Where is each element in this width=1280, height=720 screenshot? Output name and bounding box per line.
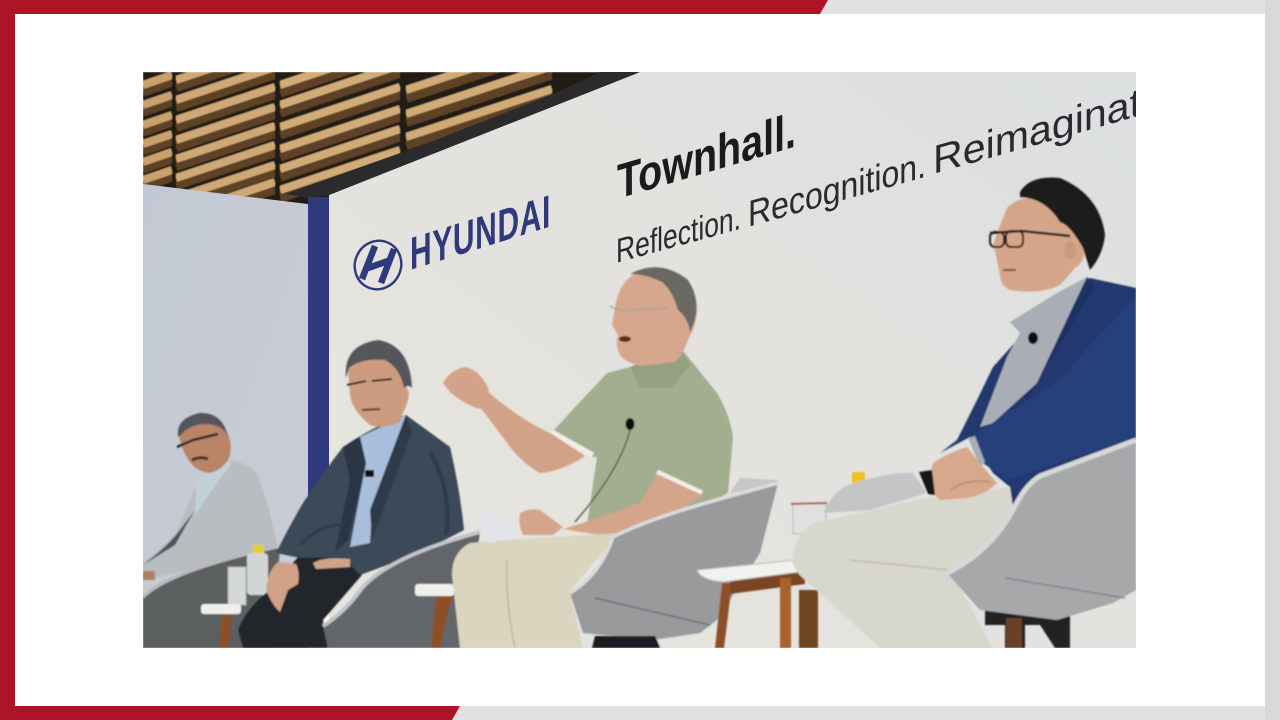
panelist 3: man in green polo — [443, 267, 733, 648]
subheading: Reflection. — [616, 199, 741, 271]
table three — [697, 560, 818, 648]
ceiling beam — [285, 72, 640, 198]
table two — [415, 584, 454, 648]
table with water bottle and glass — [201, 545, 268, 648]
Hyundai logo — [353, 196, 548, 290]
subheading: Recognition. — [748, 143, 926, 235]
bottle and glass behind panelist 4 — [791, 472, 927, 534]
logo wordmark: HYUNDAI — [410, 184, 551, 280]
panelist 4: man in navy blazer — [792, 178, 1136, 648]
event photograph — [143, 42, 1142, 648]
main white wall — [329, 72, 1136, 648]
panelist 2: man in dark blazer — [238, 340, 464, 648]
wood slat ceiling — [143, 72, 636, 204]
panelist 3: chair — [570, 478, 778, 648]
blue wall stripe — [308, 197, 329, 502]
panelist 1: chair — [143, 545, 280, 648]
panelist 1: man in light grey jacket — [143, 413, 277, 580]
subheading: Reimaginat — [933, 79, 1142, 183]
logo emblem — [353, 240, 403, 290]
left wall panel — [143, 184, 308, 648]
heading: Townhall: Townhall. — [617, 102, 796, 210]
subheading — [618, 90, 1136, 262]
panelist 4: chair — [947, 440, 1136, 648]
panelist 2: chair — [323, 532, 480, 648]
